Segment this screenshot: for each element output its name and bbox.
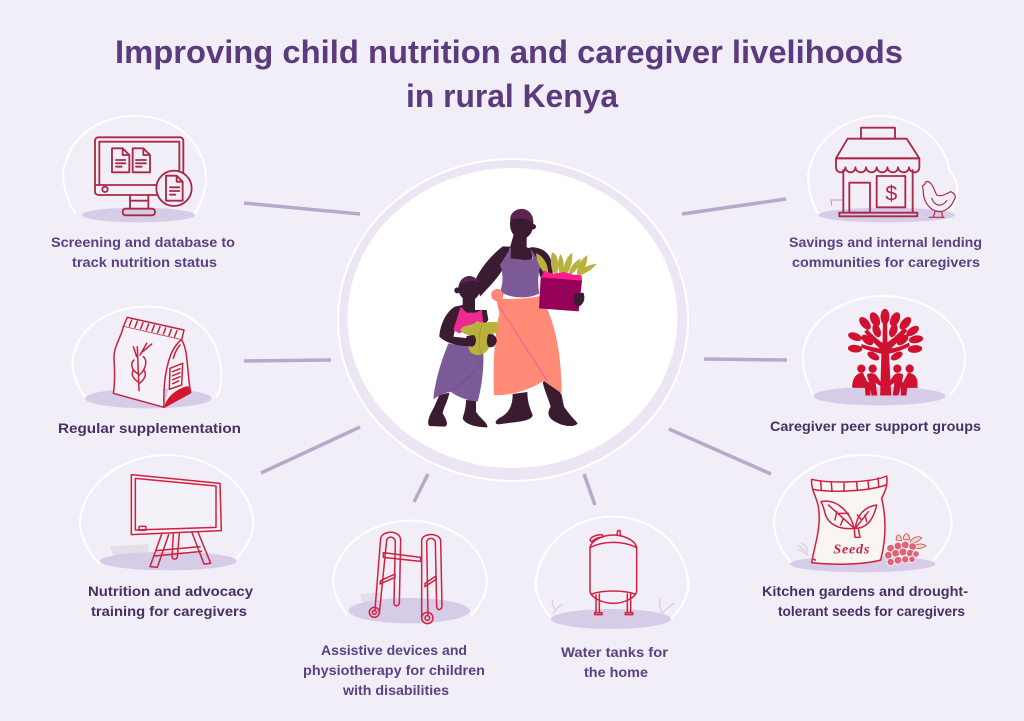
icon: tree with people xyxy=(848,309,923,395)
icon: supplement bag xyxy=(113,317,191,407)
bag base shading xyxy=(164,386,191,407)
child top xyxy=(453,307,483,333)
child bananas xyxy=(460,321,499,355)
woman right arm xyxy=(530,247,553,278)
title: in rural Kenya xyxy=(406,78,618,114)
label xyxy=(51,234,235,270)
item: nutrition and advocacy training xyxy=(80,455,253,619)
item: kitchen gardens and seeds: Seeds xyxy=(833,542,870,557)
title: Improving child nutrition and caregiver livelihoods xyxy=(115,34,903,70)
ground and dome xyxy=(790,556,935,572)
item: savings and internal lending xyxy=(789,116,982,270)
icon: computer monitor with documents xyxy=(95,137,192,215)
icon: walker xyxy=(369,532,442,624)
woman skirt xyxy=(494,296,562,395)
icon: water tank xyxy=(590,531,637,615)
label: with disabilities xyxy=(342,682,449,698)
icon: seed sack xyxy=(812,476,887,564)
seed pile xyxy=(884,534,926,566)
icon: shop xyxy=(831,128,919,216)
label: Kitchen gardens and drought- xyxy=(762,583,968,599)
ground and dome xyxy=(360,593,380,603)
label: Water tanks for xyxy=(561,644,669,660)
sprig xyxy=(797,543,808,556)
icon: presentation board xyxy=(131,475,221,567)
central circle with caregiver and child xyxy=(338,159,688,481)
label: tolerant seeds for caregivers xyxy=(778,603,965,619)
label: track nutrition status xyxy=(72,254,217,270)
label xyxy=(88,583,253,619)
child hands xyxy=(465,334,497,347)
connector lines xyxy=(244,199,787,505)
child dress xyxy=(433,343,483,402)
item: caregiver peer support groups xyxy=(770,296,981,434)
child legs xyxy=(428,393,449,427)
illustration: caregiver and child xyxy=(428,209,597,427)
label xyxy=(762,583,968,619)
title xyxy=(115,34,903,114)
people xyxy=(858,365,865,372)
item: water tanks xyxy=(536,517,688,680)
woman legs xyxy=(496,392,533,424)
label xyxy=(303,642,485,698)
ground and dome xyxy=(813,387,945,405)
icon: chicken xyxy=(922,182,955,217)
woman top xyxy=(500,247,541,297)
item: regular supplementation xyxy=(58,307,241,436)
woman head xyxy=(510,209,533,239)
item: assistive devices xyxy=(303,521,487,698)
item: kitchen gardens and seeds xyxy=(762,455,968,619)
sprigs xyxy=(552,599,675,613)
ground and dome xyxy=(82,208,195,222)
woman hand xyxy=(574,293,584,307)
label: Caregiver peer support groups xyxy=(770,418,981,434)
ground and dome xyxy=(818,208,955,222)
item: savings and internal lending: $ xyxy=(885,182,897,206)
label: Assistive devices and xyxy=(321,642,467,658)
leaves in box xyxy=(536,253,597,277)
box xyxy=(541,271,582,281)
label: training for caregivers xyxy=(91,603,247,619)
label xyxy=(789,234,982,270)
ground and dome xyxy=(85,388,212,408)
label xyxy=(561,644,669,680)
label: Nutrition and advocacy xyxy=(88,583,253,599)
ground and dome xyxy=(551,609,671,629)
label: physiotherapy for children xyxy=(303,662,485,678)
woman left arm and neck xyxy=(476,233,533,297)
item: screening and database xyxy=(51,116,235,270)
label: the home xyxy=(584,664,648,680)
label: Regular supplementation xyxy=(58,420,241,436)
label: Savings and internal lending xyxy=(789,234,982,250)
ground and dome xyxy=(110,544,148,556)
label: Screening and database to xyxy=(51,234,235,250)
child head and body xyxy=(439,298,488,347)
label: communities for caregivers xyxy=(792,254,980,270)
